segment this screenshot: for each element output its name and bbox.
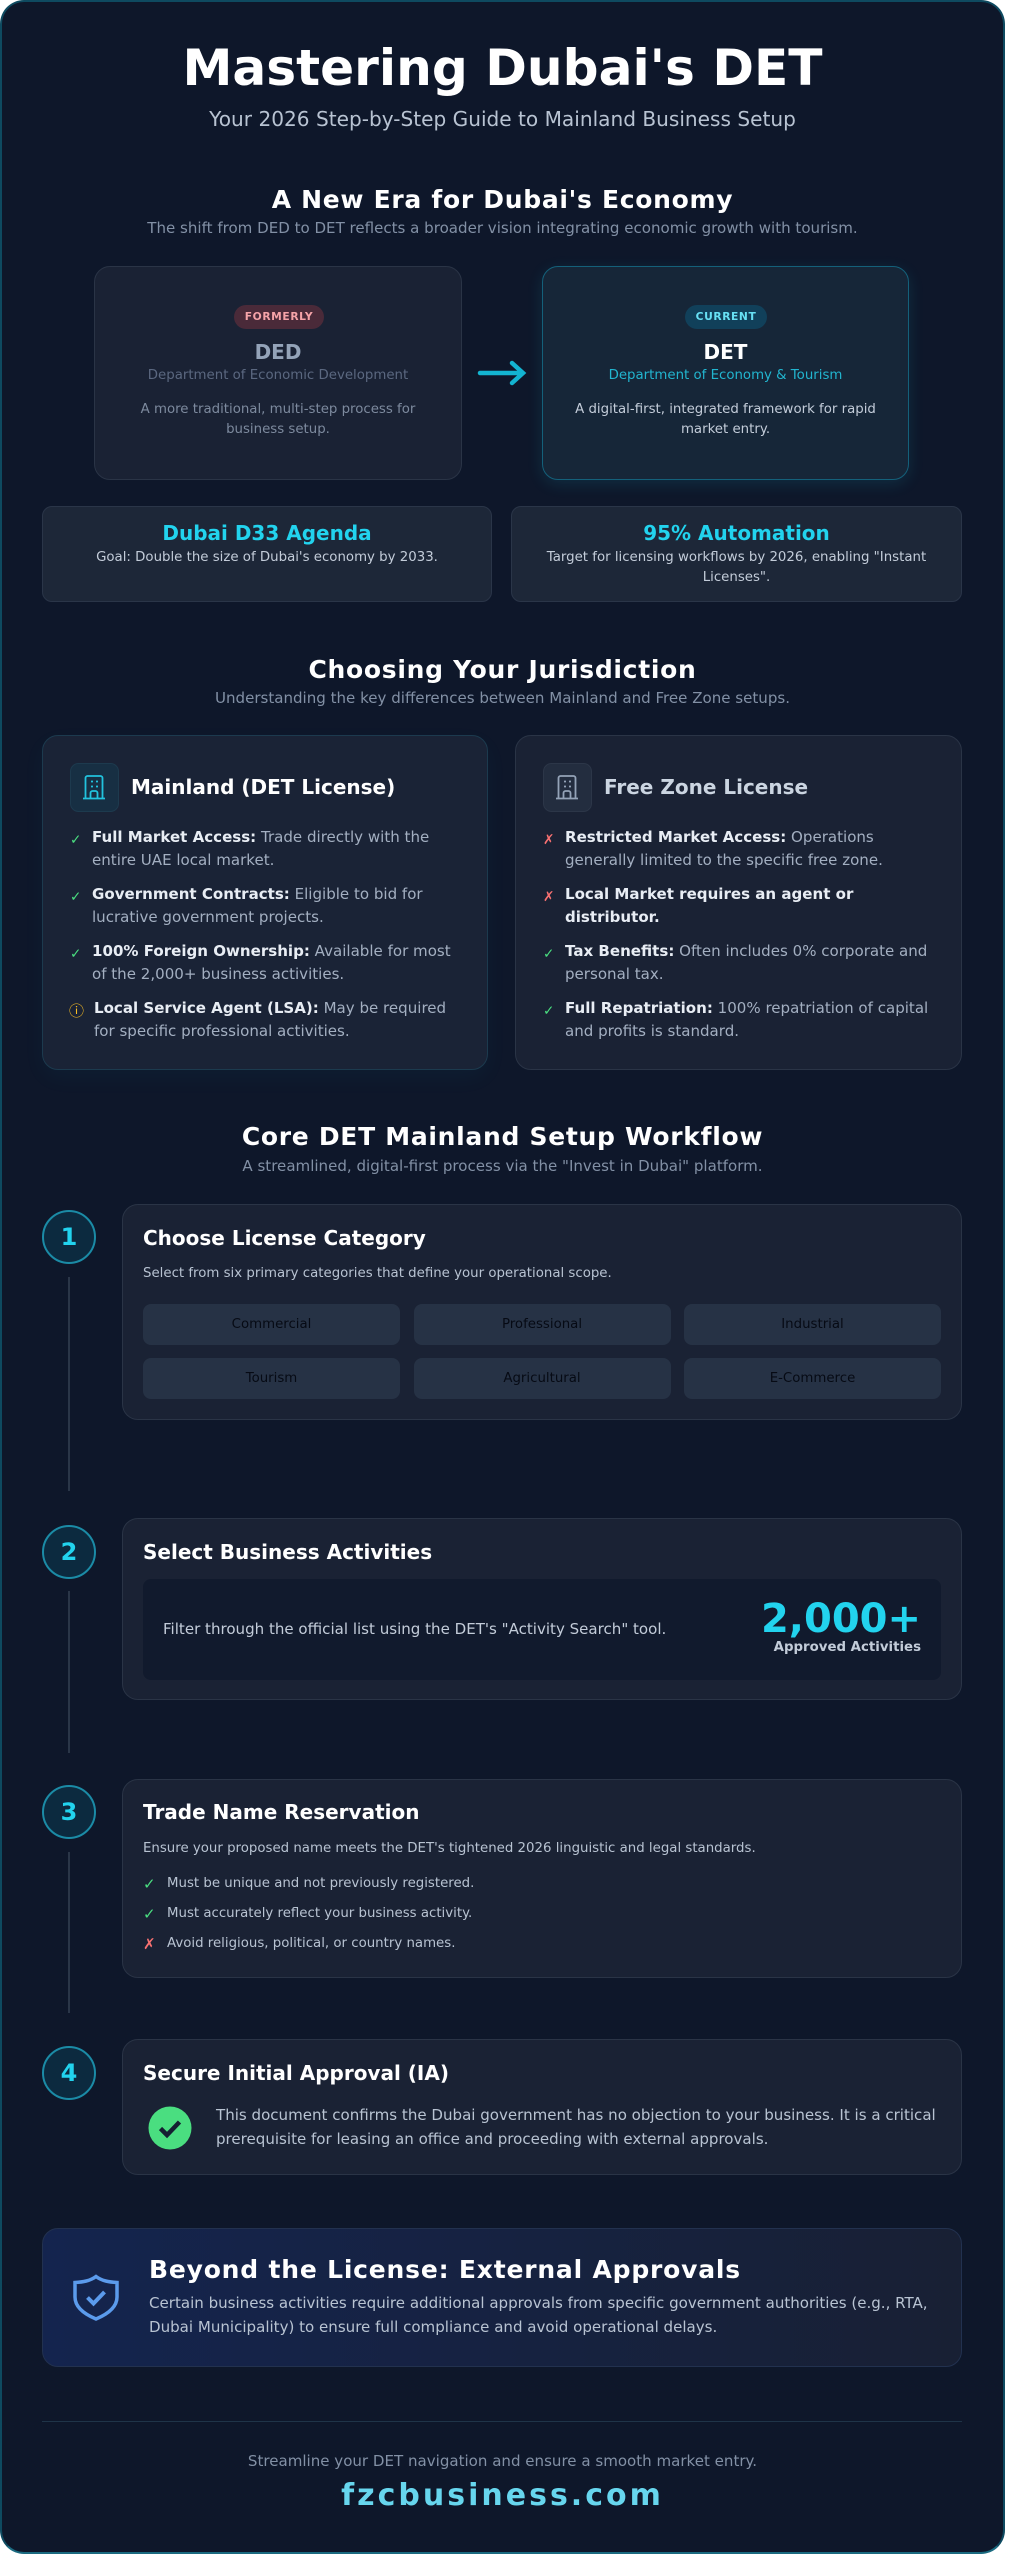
icon: building free zone: [543, 763, 592, 812]
stat label: Approved Activities: [774, 1640, 921, 1655]
DET name: DET: [704, 340, 747, 364]
panel: step 2: [122, 1518, 962, 1700]
automation text: Licenses".: [703, 570, 770, 585]
item: tax benefits: Tax Benefits: Often includes 0% corporate and: [565, 942, 927, 960]
chip: tourism: Tourism: [246, 1371, 297, 1386]
item: restricted market access: generally limited to the specific free zone.: [565, 851, 883, 869]
item: local market agent: Local Market requires an agent or: [565, 885, 853, 903]
step 1 connector: [68, 1277, 70, 1491]
banner heading: Beyond the License: External Approvals: [149, 2255, 741, 2284]
DET description: [575, 402, 876, 437]
section heading: jurisdiction: Choosing Your Jurisdiction: [308, 655, 696, 684]
DED full name: Department of Economic Development: [148, 368, 408, 383]
item: government contracts: lucrative government projects.: [92, 908, 324, 926]
automation heading: 95% Automation: [643, 521, 830, 545]
step 4 text: This document confirms the Dubai government has no objection to your business. It is a critical: [216, 2106, 936, 2124]
item: full market access: entire UAE local market.: [92, 851, 274, 869]
stat: 2,000+: 2,000+: [761, 1596, 921, 1642]
banner text: Certain business activities require additional approvals from specific government authorities (e.g., RTA,: [149, 2294, 928, 2312]
panel: step 3: [122, 1779, 962, 1978]
section heading: workflow: Core DET Mainland Setup Workflow: [242, 1122, 763, 1151]
check mark: ✓: [143, 1875, 156, 1893]
cross mark: ✗: [143, 1935, 156, 1953]
check mark 2: ✓: [70, 889, 81, 905]
check mark 3: ✓: [70, 946, 81, 962]
cross mark 1: ✗: [543, 832, 554, 848]
panel: step 4: [122, 2039, 962, 2175]
step 2 number: [42, 1525, 96, 1579]
banner text: Dubai Municipality) to ensure full compliance and avoid operational delays.: [149, 2318, 717, 2336]
step 4 number: [42, 2046, 96, 2100]
activity search text: Filter through the official list using the DET's "Activity Search" tool.: [163, 1620, 666, 1638]
DED description: A more traditional, multi-step process for: [141, 402, 415, 417]
item: full market access: [92, 828, 429, 869]
icon: green check: [148, 2106, 192, 2150]
chip: industrial: Industrial: [781, 1317, 844, 1332]
item: foreign ownership: of the 2,000+ business activities.: [92, 965, 344, 983]
item: foreign ownership: 100% Foreign Ownership: Available for most: [92, 942, 451, 960]
check mark 4: ✓: [543, 1003, 554, 1019]
panel: mainland: [42, 735, 488, 1070]
step 3 description: Ensure your proposed name meets the DET's tightened 2026 linguistic and legal standards.: [143, 1841, 756, 1856]
check mark 3: ✓: [543, 946, 554, 962]
name rule 3: Avoid religious, political, or country names.: [167, 1936, 455, 1951]
panel: DET current: [542, 266, 909, 480]
check mark 1: ✓: [70, 832, 81, 848]
DET full name: Department of Economy & Tourism: [609, 368, 842, 383]
badge: current: CURRENT: [696, 310, 756, 323]
check mark: ✓: [143, 1905, 156, 1923]
step 4 number: 4: [61, 2059, 77, 2087]
step 1 title: Choose License Category: [143, 1226, 426, 1250]
item: foreign ownership: [92, 942, 451, 983]
chip: commercial: Commercial: [232, 1317, 311, 1332]
item: local market agent: distributor.: [565, 908, 660, 926]
item: full market access: Full Market Access: Trade directly with the: [92, 828, 429, 846]
step 1 description: Select from six primary categories that define your operational scope.: [143, 1266, 612, 1281]
step 2 inner box: [143, 1579, 941, 1680]
arrow: [478, 360, 526, 386]
item: restricted market access: [565, 828, 883, 869]
step 1 number: [42, 1210, 96, 1264]
DET description: A digital-first, integrated framework for rapid: [575, 402, 876, 417]
DED name: DED: [255, 340, 301, 364]
panel: step 1: [122, 1204, 962, 1420]
DED description: business setup.: [226, 422, 330, 437]
item: tax benefits: personal tax.: [565, 965, 664, 983]
automation text: Target for licensing workflows by 2026, enabling "Instant: [547, 550, 926, 565]
step 1 number: 1: [61, 1223, 77, 1251]
chip: tourism: [143, 1358, 400, 1399]
D33 heading: Dubai D33 Agenda: [162, 521, 372, 545]
step 4 text: prerequisite for leasing an office and proceeding with external approvals.: [216, 2130, 768, 2148]
item: local service agent: for specific professional activities.: [94, 1022, 350, 1040]
step 4 text: [216, 2106, 936, 2148]
item: local market agent: [565, 885, 854, 926]
item: full repatriation: [565, 999, 928, 1040]
item: local service agent: [94, 999, 446, 1040]
chip: agricultural: Agricultural: [503, 1371, 581, 1386]
step 3 title: Trade Name Reservation: [143, 1800, 419, 1824]
step 4 title: Secure Initial Approval (IA): [143, 2061, 449, 2085]
title: Mastering Dubai's DET: [182, 38, 823, 97]
panel: DED formerly: [94, 266, 462, 480]
step 3 number: [42, 1785, 96, 1839]
chip: industrial: [684, 1304, 941, 1345]
section subtitle: jurisdiction: Understanding the key differences between Mainland and Free Zone setups.: [215, 689, 790, 707]
icon: building mainland: [70, 763, 119, 812]
badge: current: [685, 305, 767, 329]
DET description: market entry.: [681, 422, 770, 437]
name rule 2: Must accurately reflect your business activity.: [167, 1906, 472, 1921]
info mark: ⓘ: [69, 1002, 84, 1020]
panel: free zone: [515, 735, 962, 1070]
panel: D33 agenda: [42, 506, 492, 602]
DED description: [140, 402, 416, 437]
footer text: Streamline your DET navigation and ensure a smooth market entry.: [248, 2452, 757, 2470]
chip: agricultural: [414, 1358, 670, 1399]
chip: commercial: [143, 1304, 400, 1345]
item: local service agent: Local Service Agent (LSA): May be required: [94, 999, 446, 1017]
chip: e-commerce: [684, 1358, 941, 1399]
mainland heading: Mainland (DET License): [131, 775, 395, 799]
step 2 connector: [68, 1591, 70, 1753]
item: restricted market access: Restricted Market Access: Operations: [565, 828, 874, 846]
free zone heading: Free Zone License: [604, 775, 808, 799]
step 3 connector: [68, 1852, 70, 2013]
badge: formerly: FORMERLY: [245, 310, 313, 323]
D33 text: Goal: Double the size of Dubai's economy by 2033.: [96, 550, 438, 565]
footer brand: fzcbusiness.com: [341, 2478, 664, 2513]
section subtitle: workflow: A streamlined, digital-first process via the "Invest in Dubai" platform.: [242, 1157, 763, 1175]
step 3 number: 3: [61, 1798, 77, 1826]
panel: automation: [511, 506, 962, 602]
icon: shield check: [73, 2274, 119, 2321]
cross mark 2: ✗: [543, 889, 554, 905]
subtitle: Your 2026 Step-by-Step Guide to Mainland Business Setup: [209, 107, 796, 131]
name rule 1: Must be unique and not previously registered.: [167, 1876, 474, 1891]
item: government contracts: Government Contracts: Eligible to bid for: [92, 885, 423, 903]
step 2 number: 2: [61, 1538, 77, 1566]
step 2 title: Select Business Activities: [143, 1540, 432, 1564]
item: full repatriation: and profits is standard.: [565, 1022, 739, 1040]
chip: e-commerce: E-Commerce: [770, 1371, 855, 1386]
item: government contracts: [92, 885, 423, 926]
section subtitle: new era: The shift from DED to DET reflects a broader vision integrating economic growth with tourism.: [147, 219, 858, 237]
banner text: [149, 2294, 928, 2336]
section heading: new era: A New Era for Dubai's Economy: [272, 185, 733, 214]
chip: professional: Professional: [502, 1317, 582, 1332]
automation text: [546, 550, 926, 585]
chip: professional: [414, 1304, 670, 1345]
item: tax benefits: [565, 942, 927, 983]
item: full repatriation: Full Repatriation: 100% repatriation of capital: [565, 999, 928, 1017]
badge: formerly: [234, 305, 324, 329]
panel: external approvals: [42, 2228, 962, 2367]
